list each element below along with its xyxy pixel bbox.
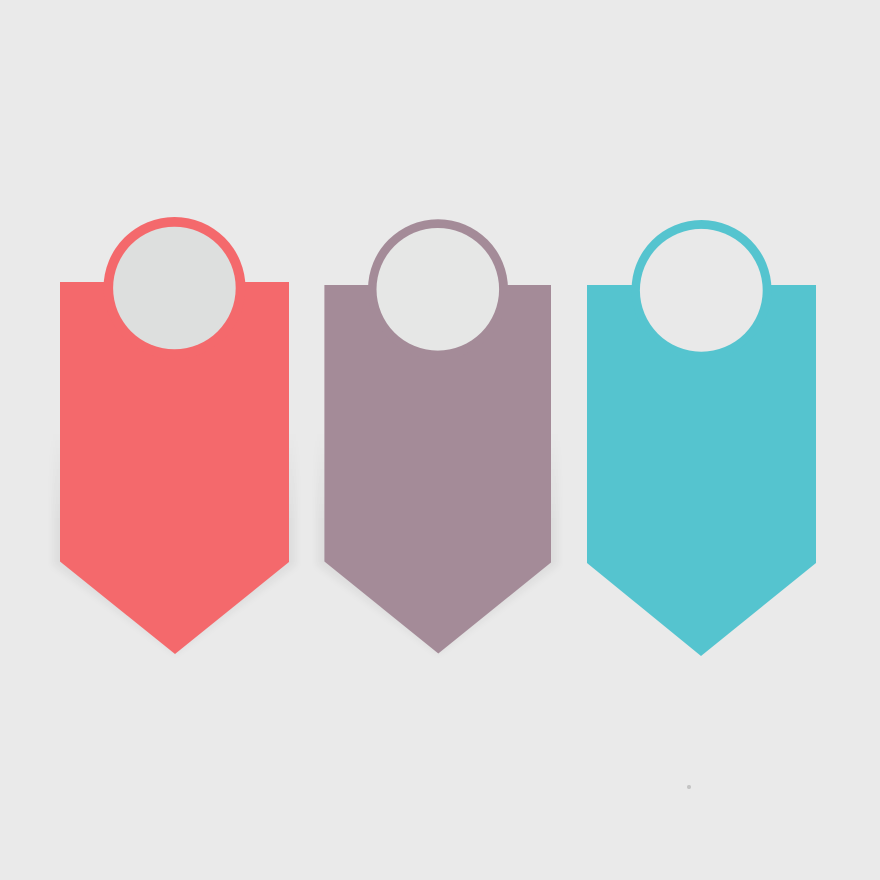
banner: mauve <box>317 219 558 654</box>
banner body: mauve <box>324 285 551 654</box>
circle: red banner <box>113 227 236 349</box>
banner: red <box>53 217 296 654</box>
circle: mauve banner <box>376 228 499 351</box>
banner: teal <box>587 220 816 656</box>
small dot <box>687 785 691 789</box>
ring: red <box>104 217 246 359</box>
circle: teal banner <box>640 229 763 352</box>
banner body: red <box>60 282 289 654</box>
banner body: teal <box>587 285 816 656</box>
ring: teal <box>632 220 772 360</box>
ring: mauve <box>368 219 508 359</box>
